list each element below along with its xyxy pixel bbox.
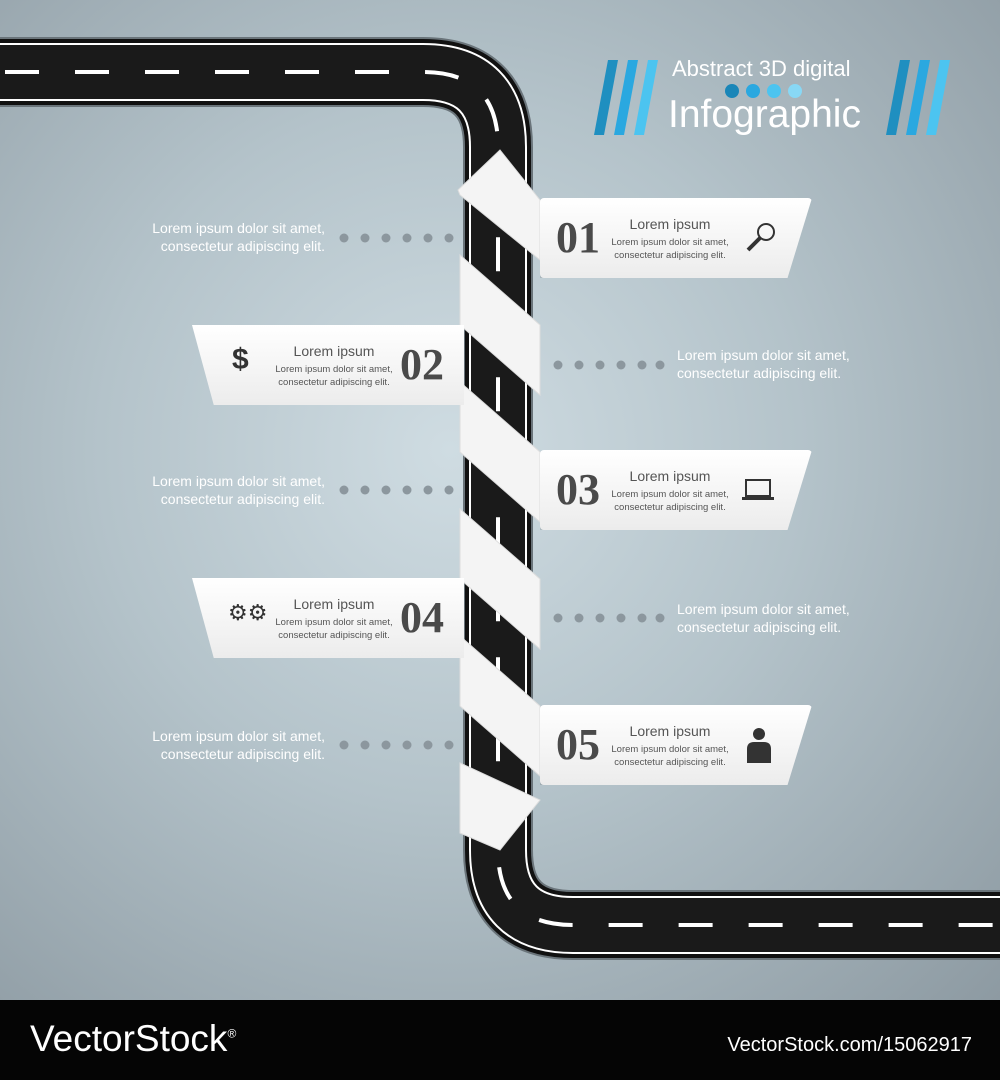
side texts and dots: Lorem ipsum dolor sit amet, <box>152 728 325 744</box>
card 02: consectetur adipiscing elit. <box>278 377 390 388</box>
card 01: Lorem ipsum <box>630 216 710 232</box>
card 04: consectetur adipiscing elit. <box>278 630 390 641</box>
title: Infographic <box>668 93 861 136</box>
card 04 <box>192 578 464 658</box>
side texts and dots: Lorem ipsum dolor sit amet, <box>677 347 850 363</box>
card 05: Lorem ipsum dolor sit amet, <box>611 744 729 755</box>
side texts and dots: Lorem ipsum dolor sit amet, <box>152 220 325 236</box>
card 04: 04 <box>400 593 444 642</box>
card 05: 05 <box>556 720 600 769</box>
card 01: 01 <box>556 213 600 262</box>
card 02: Lorem ipsum dolor sit amet, <box>275 364 393 375</box>
card 01 <box>540 198 812 278</box>
side texts and dots: consectetur adipiscing elit. <box>677 365 841 381</box>
card 04: Lorem ipsum dolor sit amet, <box>275 617 393 628</box>
side texts and dots: Lorem ipsum dolor sit amet, <box>152 473 325 489</box>
title <box>594 56 950 136</box>
card 05: consectetur adipiscing elit. <box>614 757 726 768</box>
card 05: Lorem ipsum <box>630 723 710 739</box>
card 01: consectetur adipiscing elit. <box>614 250 726 261</box>
side texts and dots: consectetur adipiscing elit. <box>677 619 841 635</box>
card 02: Lorem ipsum <box>294 343 374 359</box>
card 03: Lorem ipsum <box>630 468 710 484</box>
title: Abstract 3D digital <box>672 56 851 81</box>
card 02: 02 <box>400 340 444 389</box>
side texts and dots: consectetur adipiscing elit. <box>161 491 325 507</box>
footer bar: VectorStock® <box>30 1018 236 1059</box>
card 04: ⚙⚙ <box>228 600 267 625</box>
card 03 <box>540 450 812 530</box>
side texts and dots: Lorem ipsum dolor sit amet, <box>677 601 850 617</box>
side texts and dots: consectetur adipiscing elit. <box>161 238 325 254</box>
card 02 <box>192 325 464 405</box>
card 03: Lorem ipsum dolor sit amet, <box>611 489 729 500</box>
footer bar <box>0 1000 1000 1080</box>
card 03: 03 <box>556 465 600 514</box>
card 01: Lorem ipsum dolor sit amet, <box>611 237 729 248</box>
card 03: consectetur adipiscing elit. <box>614 502 726 513</box>
card 04: Lorem ipsum <box>294 596 374 612</box>
footer bar: VectorStock.com/15062917 <box>727 1034 972 1056</box>
card 02: $ <box>232 343 249 376</box>
card 05 <box>540 705 812 785</box>
side texts and dots: consectetur adipiscing elit. <box>161 746 325 762</box>
